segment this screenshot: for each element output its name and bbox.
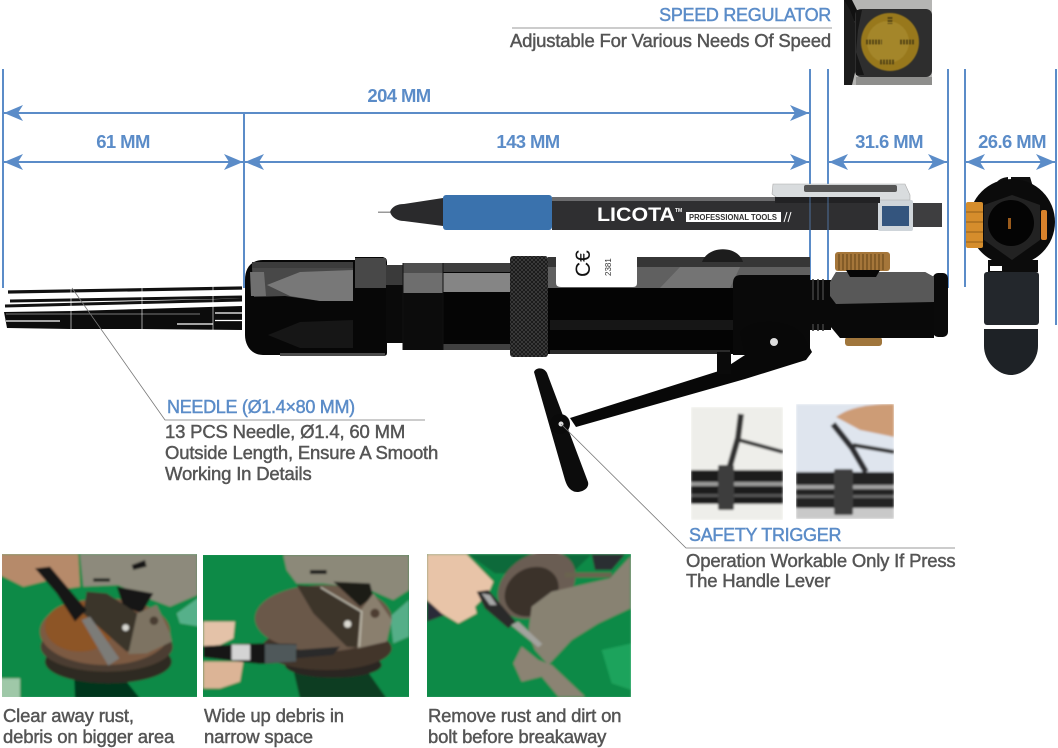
- rear block: [733, 275, 810, 355]
- callout: safety trigger: [561, 424, 955, 591]
- callout: safety trigger: The Handle Lever: [686, 570, 830, 591]
- air tool needles: [4, 286, 242, 332]
- photo: trigger released: [691, 407, 783, 520]
- pen for size comparison: LICOTA: [597, 204, 675, 226]
- callout: needle: Outside Length, Ensure A Smooth: [165, 442, 438, 463]
- white CE label: C€: [572, 250, 595, 277]
- callout: needle: Working In Details: [165, 463, 312, 484]
- safety button: [702, 249, 743, 262]
- photo: trigger pressed: [796, 404, 894, 519]
- white CE label: 2381: [604, 258, 613, 276]
- speed regulator valve: [830, 252, 948, 346]
- threaded fitting: [809, 279, 831, 331]
- photo: speed regulator knob: [844, 0, 932, 85]
- callout: speed regulator: Adjustable For Various Needs Of Speed: [510, 30, 831, 51]
- caption: photo 2: narrow space: [204, 726, 313, 747]
- callout: safety trigger: SAFETY TRIGGER: [689, 525, 841, 545]
- caption: photo 1: Clear away rust,: [3, 705, 134, 726]
- pen for size comparison: TM: [675, 208, 682, 214]
- main housing: [548, 257, 810, 354]
- caption: photo 3: bolt before breakaway: [428, 726, 607, 747]
- callout: speed regulator: SPEED REGULATOR: [659, 5, 831, 25]
- callout: needle: NEEDLE (Ø1.4×80 MM): [167, 397, 355, 417]
- brass side knob: [966, 202, 983, 248]
- safety trigger lever: [534, 322, 812, 492]
- pen for size comparison: [378, 184, 942, 231]
- photo: bolt before breakaway: [427, 554, 631, 697]
- nose head: [245, 257, 387, 356]
- dimension label: 61 MM: 61 MM: [96, 131, 150, 152]
- caption: photo 1: debris on bigger area: [3, 726, 175, 747]
- white CE label: [556, 250, 637, 287]
- caption: photo 2: Wide up debris in: [204, 705, 344, 726]
- caption: photo 1: [3, 705, 175, 747]
- callout: speed regulator: [510, 5, 832, 51]
- dimension lines: [3, 69, 1056, 325]
- pen for size comparison: PROFESSIONAL TOOLS: [689, 213, 778, 222]
- dimension label: 26.6 MM: 26.6 MM: [978, 131, 1046, 152]
- knurled collar: [510, 256, 548, 357]
- barrel segments: [386, 263, 511, 350]
- callout: safety trigger: Operation Workable Only If Press: [686, 550, 955, 571]
- callout: needle: 13 PCS Needle, Ø1.4, 60 MM: [165, 421, 405, 442]
- caption: photo 2: [204, 705, 344, 747]
- callout: needle: [72, 288, 438, 484]
- photo: clearing rust on bigger area: [0, 553, 200, 698]
- end view of tool: [966, 176, 1055, 375]
- caption: photo 3: [428, 705, 621, 747]
- dimension label: 204 MM: 204 MM: [367, 85, 431, 106]
- dimension label: 143 MM: 143 MM: [496, 131, 560, 152]
- caption: photo 3: Remove rust and dirt on: [428, 705, 621, 726]
- photo: narrow space: [200, 553, 413, 698]
- air tool body: [245, 249, 831, 357]
- dimension label: 31.6 MM: 31.6 MM: [855, 131, 923, 152]
- brass knob: [835, 252, 890, 271]
